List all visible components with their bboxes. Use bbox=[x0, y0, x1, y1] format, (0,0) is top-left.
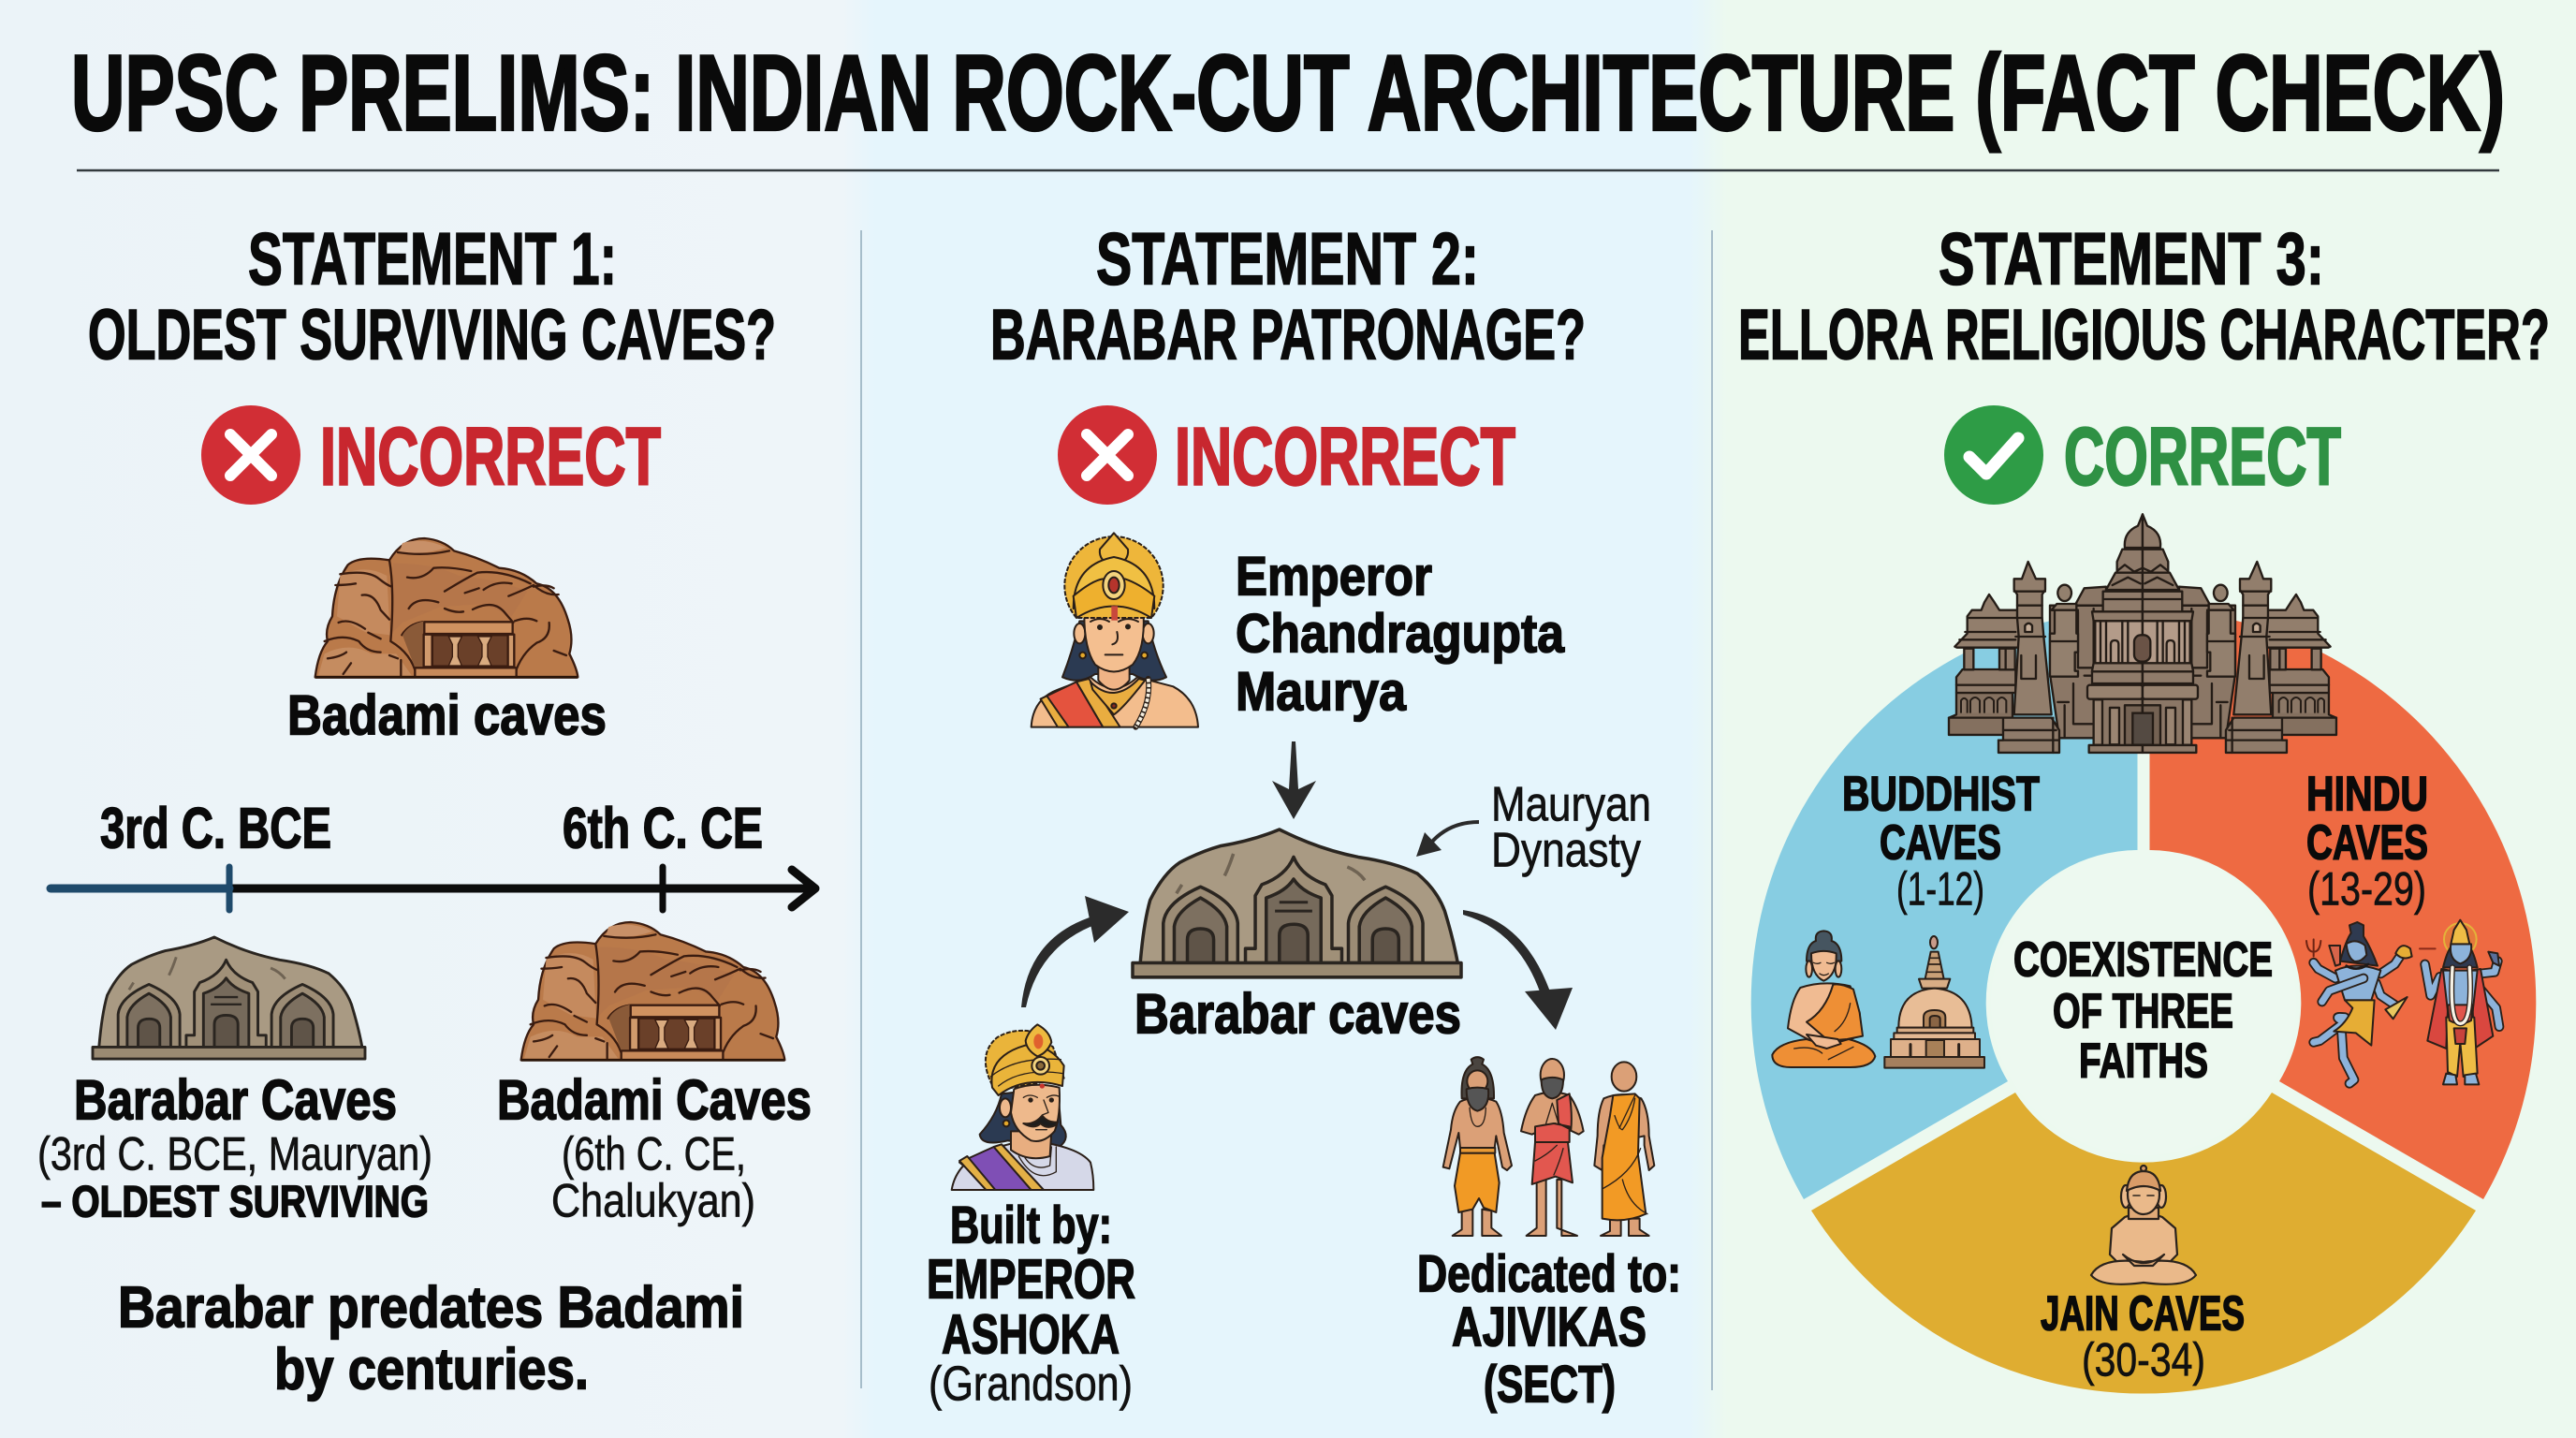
center: coexistence of three faiths: COEXISTENCE bbox=[2013, 932, 2273, 987]
text block: dedicated to ajivikas: (SECT) bbox=[1484, 1354, 1616, 1414]
text block: built by ashoka: Built by: bbox=[950, 1195, 1112, 1255]
label: hindu caves bbox=[2306, 768, 2428, 916]
text block: built by ashoka: (Grandson) bbox=[929, 1357, 1133, 1412]
center: coexistence of three faiths: FAITHS bbox=[2079, 1034, 2208, 1088]
text block: badami caves: Badami Caves bbox=[497, 1069, 812, 1131]
verdict: correct bbox=[1944, 405, 2341, 505]
text block: badami caves: (6th C. CE, bbox=[562, 1127, 746, 1180]
verdict: incorrect: INCORRECT bbox=[1175, 412, 1515, 502]
icon: ellora temple bbox=[1949, 514, 2336, 753]
label: jain caves bbox=[2041, 1286, 2245, 1386]
icon: seated buddha bbox=[1772, 931, 1875, 1067]
label: buddhist caves: BUDDHIST bbox=[1842, 768, 2040, 822]
panel: statement 3 bbox=[1738, 217, 2550, 1394]
heading: statement 1 bbox=[88, 217, 776, 374]
arrow: chandragupta to cave bbox=[1272, 741, 1316, 819]
label: mauryan dynasty: Mauryan bbox=[1491, 777, 1651, 831]
verdict: incorrect: INCORRECT bbox=[320, 412, 661, 502]
icon: jain tirthankara bbox=[2091, 1166, 2196, 1284]
icon: badami caves small bbox=[521, 922, 784, 1060]
timeline: 6th C. CE bbox=[563, 796, 763, 859]
verdict: incorrect bbox=[1058, 405, 1515, 505]
conclusion: by centuries. bbox=[274, 1337, 589, 1402]
label: jain caves: JAIN CAVES bbox=[2041, 1286, 2245, 1341]
text block: badami caves: Chalukyan) bbox=[551, 1174, 755, 1226]
label: emperor chandragupta maurya: Maurya bbox=[1236, 661, 1407, 723]
heading: statement 1: OLDEST SURVIVING CAVES? bbox=[88, 296, 776, 374]
panel: statement 1 bbox=[37, 217, 815, 1402]
label: mauryan dynasty bbox=[1491, 777, 1651, 878]
text block: dedicated to ajivikas bbox=[1417, 1243, 1681, 1414]
label: emperor chandragupta maurya: Emperor bbox=[1236, 547, 1432, 607]
heading: statement 2: BARABAR PATRONAGE? bbox=[990, 296, 1586, 374]
label: emperor chandragupta maurya bbox=[1236, 547, 1565, 723]
label: barabar caves: Barabar caves bbox=[1134, 983, 1461, 1045]
heading: statement 2 bbox=[990, 217, 1586, 374]
text block: built by ashoka bbox=[927, 1195, 1135, 1412]
text block: badami caves bbox=[497, 1069, 812, 1226]
text block: built by ashoka: ASHOKA bbox=[942, 1303, 1120, 1365]
panel: statement 2 bbox=[927, 217, 1681, 1414]
label: hindu caves: HINDU bbox=[2306, 768, 2428, 822]
figure: praying ascetic bbox=[1521, 1059, 1584, 1236]
heading: statement 3 bbox=[1738, 217, 2550, 374]
text block: built by ashoka: EMPEROR bbox=[927, 1249, 1135, 1311]
timeline: 3rd C. BCE bbox=[100, 796, 331, 859]
arrow: ashoka to cave bbox=[1021, 896, 1129, 1007]
figure: robed monk bbox=[1594, 1062, 1654, 1236]
icon: badami caves bbox=[315, 538, 578, 677]
icon: barabar caves small bbox=[93, 937, 365, 1059]
timeline bbox=[51, 796, 815, 910]
conclusion bbox=[118, 1275, 744, 1402]
label: buddhist caves: (1-12) bbox=[1896, 863, 1984, 916]
center: coexistence of three faiths: OF THREE bbox=[2053, 985, 2233, 1039]
icon: emperor chandragupta bbox=[1032, 533, 1198, 727]
verdict: incorrect bbox=[201, 405, 661, 505]
text block: barabar caves: Barabar Caves bbox=[74, 1069, 397, 1131]
figure: bearded ascetic bbox=[1443, 1057, 1512, 1236]
text block: barabar caves bbox=[37, 1069, 432, 1226]
icon: vishnu bbox=[2420, 920, 2499, 1084]
label: emperor chandragupta maurya: Chandragupta bbox=[1236, 603, 1565, 665]
label: hindu caves: CAVES bbox=[2306, 816, 2428, 871]
heading: statement 1: STATEMENT 1: bbox=[248, 217, 617, 300]
segment: buddhist bbox=[1751, 609, 2138, 1199]
label: badami caves: Badami caves bbox=[287, 683, 607, 747]
label: buddhist caves: CAVES bbox=[1880, 816, 2001, 871]
center: coexistence of three faiths bbox=[1991, 850, 2296, 1155]
icon: ajivika ascetics bbox=[1443, 1057, 1654, 1236]
text block: dedicated to ajivikas: Dedicated to: bbox=[1417, 1243, 1681, 1303]
chart: ellora donut bbox=[1751, 609, 2536, 1394]
segment: jain bbox=[1811, 1093, 2476, 1394]
label: hindu caves: (13-29) bbox=[2307, 863, 2426, 916]
icon: emperor ashoka bbox=[952, 1024, 1093, 1190]
label: buddhist caves bbox=[1842, 768, 2040, 916]
heading: statement 3: STATEMENT 3: bbox=[1939, 217, 2324, 300]
arrow: mauryan dynasty bbox=[1416, 822, 1479, 857]
label: mauryan dynasty: Dynasty bbox=[1491, 824, 1641, 878]
arrow: cave to ajivikas bbox=[1463, 910, 1573, 1030]
verdict: correct: CORRECT bbox=[2064, 412, 2341, 502]
icon: shiva bbox=[2306, 922, 2412, 1083]
text block: barabar caves: (3rd C. BCE, Mauryan) bbox=[37, 1127, 432, 1180]
label: jain caves: (30-34) bbox=[2082, 1333, 2205, 1386]
text block: barabar caves: – OLDEST SURVIVING bbox=[41, 1176, 429, 1226]
conclusion: Barabar predates Badami bbox=[118, 1275, 744, 1341]
heading: statement 2: STATEMENT 2: bbox=[1096, 217, 1479, 300]
icon: barabar caves bbox=[1133, 829, 1461, 977]
segment: hindu bbox=[2149, 609, 2536, 1199]
text block: dedicated to ajivikas: AJIVIKAS bbox=[1452, 1296, 1647, 1357]
icon: stupa bbox=[1884, 936, 1984, 1068]
